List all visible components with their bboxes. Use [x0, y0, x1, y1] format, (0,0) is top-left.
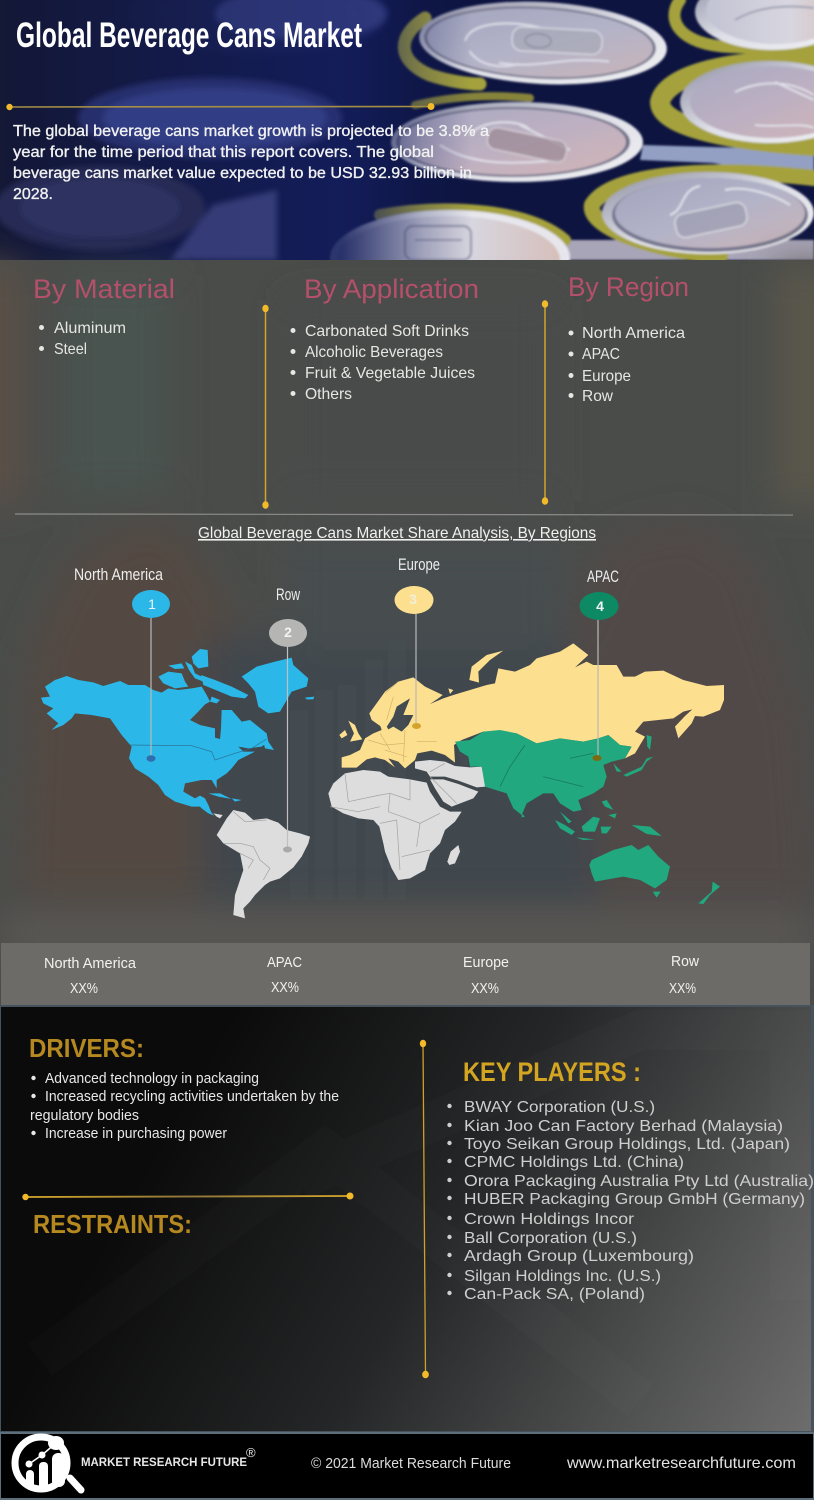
- table column: APAC: APAC: [267, 955, 302, 971]
- table column: Row: [669, 954, 700, 997]
- can C: [680, 61, 814, 143]
- list: materials: [39, 320, 126, 358]
- table column: APAC: [267, 955, 302, 996]
- copyright: © 2021 Market Research Future: [311, 1456, 511, 1472]
- marker: 3 Europe: [394, 555, 440, 729]
- table column: Europe: XX%: [471, 981, 499, 997]
- table column: Europe: Europe: [463, 955, 509, 971]
- heading: by application: By Application: [304, 274, 479, 304]
- veiled can at the top: [348, 0, 389, 40]
- title: Global Beverage Cans Market: [16, 16, 362, 55]
- marker: 2 Row: Row: [276, 585, 301, 604]
- list: applications: Alcoholic Beverages: [305, 344, 443, 361]
- registered mark: ®: [246, 1445, 256, 1460]
- divider: drivers and restraints gold line: [22, 1192, 354, 1200]
- list: drivers: Increased recycling activities undertaken by the: [45, 1089, 339, 1105]
- text block: market summary: beverage cans market value expected to be USD 32.93 billion in: [13, 165, 472, 182]
- list: drivers: Increase in purchasing power: [45, 1126, 227, 1142]
- list: regions: Row: [582, 388, 613, 405]
- list: key players: Can-Pack SA, (Poland): [464, 1286, 645, 1303]
- marker: 1 North America: 1: [148, 596, 156, 612]
- panel: header with beverage can photo background: [0, 0, 814, 260]
- map region: Europe and Russia: [339, 643, 724, 768]
- list: key players: HUBER Packaging Group GmbH (Germany): [464, 1191, 805, 1208]
- heading: market share analysis: Global Beverage Cans Market Share Analysis, By Regions: [198, 525, 596, 542]
- text block: market summary: The global beverage cans market growth is projected to be 3.8% a: [13, 123, 489, 140]
- icon: market research future logo: [15, 1436, 81, 1490]
- table column: Row: Row: [671, 954, 700, 970]
- list: applications: [290, 323, 475, 403]
- list: applications: Fruit & Vegetable Juices: [305, 365, 475, 382]
- heading: by region: By Region: [568, 272, 689, 302]
- marker: 4 APAC: [580, 567, 619, 761]
- marker: 4 APAC: 4: [596, 598, 604, 614]
- list: regions: APAC: [582, 346, 620, 363]
- marker: 3 Europe: Europe: [398, 555, 440, 574]
- can B: [695, 0, 814, 50]
- list: key players: Ardagh Group (Luxembourg): [464, 1248, 694, 1265]
- text block: market summary: year for the time period that this report covers. The global: [13, 144, 434, 161]
- table column: North America: XX%: [70, 981, 98, 997]
- website: www.marketresearchfuture.com: [566, 1455, 796, 1472]
- marker: 2 Row: [269, 585, 307, 852]
- can D: [391, 102, 643, 182]
- list: drivers: [30, 1071, 339, 1142]
- marker: 4 APAC: APAC: [587, 567, 619, 586]
- panel: drivers, restraints and key players: [0, 1005, 814, 1432]
- marker: 1 North America: North America: [74, 565, 163, 584]
- panel: regional share table: [1, 943, 810, 1005]
- map region: North America: [41, 649, 314, 816]
- list: key players: Ball Corporation (U.S.): [464, 1230, 637, 1247]
- table column: North America: [44, 956, 137, 997]
- marker: 1 North America: [74, 565, 170, 762]
- divider: header gold line: [6, 103, 435, 110]
- list: regions: North America: [582, 325, 685, 342]
- heading: drivers: DRIVERS:: [29, 1033, 144, 1063]
- list: applications: Carbonated Soft Drinks: [305, 323, 469, 340]
- can F: [330, 208, 572, 260]
- text block: market summary: [13, 123, 489, 203]
- panel: by material: [33, 274, 175, 358]
- list: key players: CPMC Holdings Ltd. (China): [464, 1154, 684, 1171]
- list: key players: Kian Joo Can Factory Berhad (Malaysia): [464, 1118, 783, 1135]
- heading: by material: By Material: [33, 274, 175, 304]
- panel: by region: [568, 272, 689, 405]
- chart: world map by region: [41, 643, 724, 918]
- list: key players: Orora Packaging Australia Pty Ltd (Australia): [464, 1173, 814, 1190]
- heading: key players: KEY PLAYERS :: [463, 1057, 641, 1087]
- list: key players: [447, 1099, 814, 1303]
- brand name: MARKET RESEARCH FUTURE: [81, 1457, 247, 1469]
- panel: footer: [0, 1432, 814, 1500]
- divider: key players vertical gold line: [420, 1040, 429, 1378]
- divider: vertical gold line one: [262, 305, 269, 509]
- panel: by application: [290, 274, 479, 403]
- table column: North America: North America: [44, 956, 137, 972]
- list: regions: [568, 325, 685, 405]
- list: key players: Crown Holdings Incor: [464, 1211, 635, 1228]
- panel: segmentation and map background: [0, 260, 814, 1006]
- map region: South America, Africa and Middle East / Row: [213, 760, 486, 918]
- list: key players: Silgan Holdings Inc. (U.S.): [464, 1268, 661, 1285]
- map region: Asia Pacific: [455, 730, 720, 904]
- can A: [417, 0, 669, 90]
- list: materials: Steel: [54, 341, 87, 358]
- list: drivers: Advanced technology in packaging: [45, 1071, 259, 1087]
- list: drivers: regulatory bodies: [30, 1108, 139, 1124]
- table column: Europe: [463, 955, 509, 997]
- text block: market summary: 2028.: [13, 186, 53, 203]
- list: regions: Europe: [582, 368, 631, 385]
- table column: APAC: XX%: [271, 980, 299, 996]
- divider: vertical gold line two: [542, 300, 548, 505]
- list: materials: Aluminum: [54, 320, 126, 337]
- heading: restraints: RESTRAINTS:: [33, 1209, 192, 1239]
- list: key players: Toyo Seikan Group Holdings, Ltd. (Japan): [464, 1136, 790, 1153]
- table column: Row: XX%: [669, 981, 696, 997]
- list: key players: BWAY Corporation (U.S.): [464, 1099, 655, 1116]
- marker: 2 Row: 2: [284, 624, 292, 640]
- map sea: Caspian: [458, 752, 468, 767]
- can E: [602, 172, 814, 254]
- marker: 3 Europe: 3: [409, 591, 417, 607]
- list: applications: Others: [305, 386, 352, 403]
